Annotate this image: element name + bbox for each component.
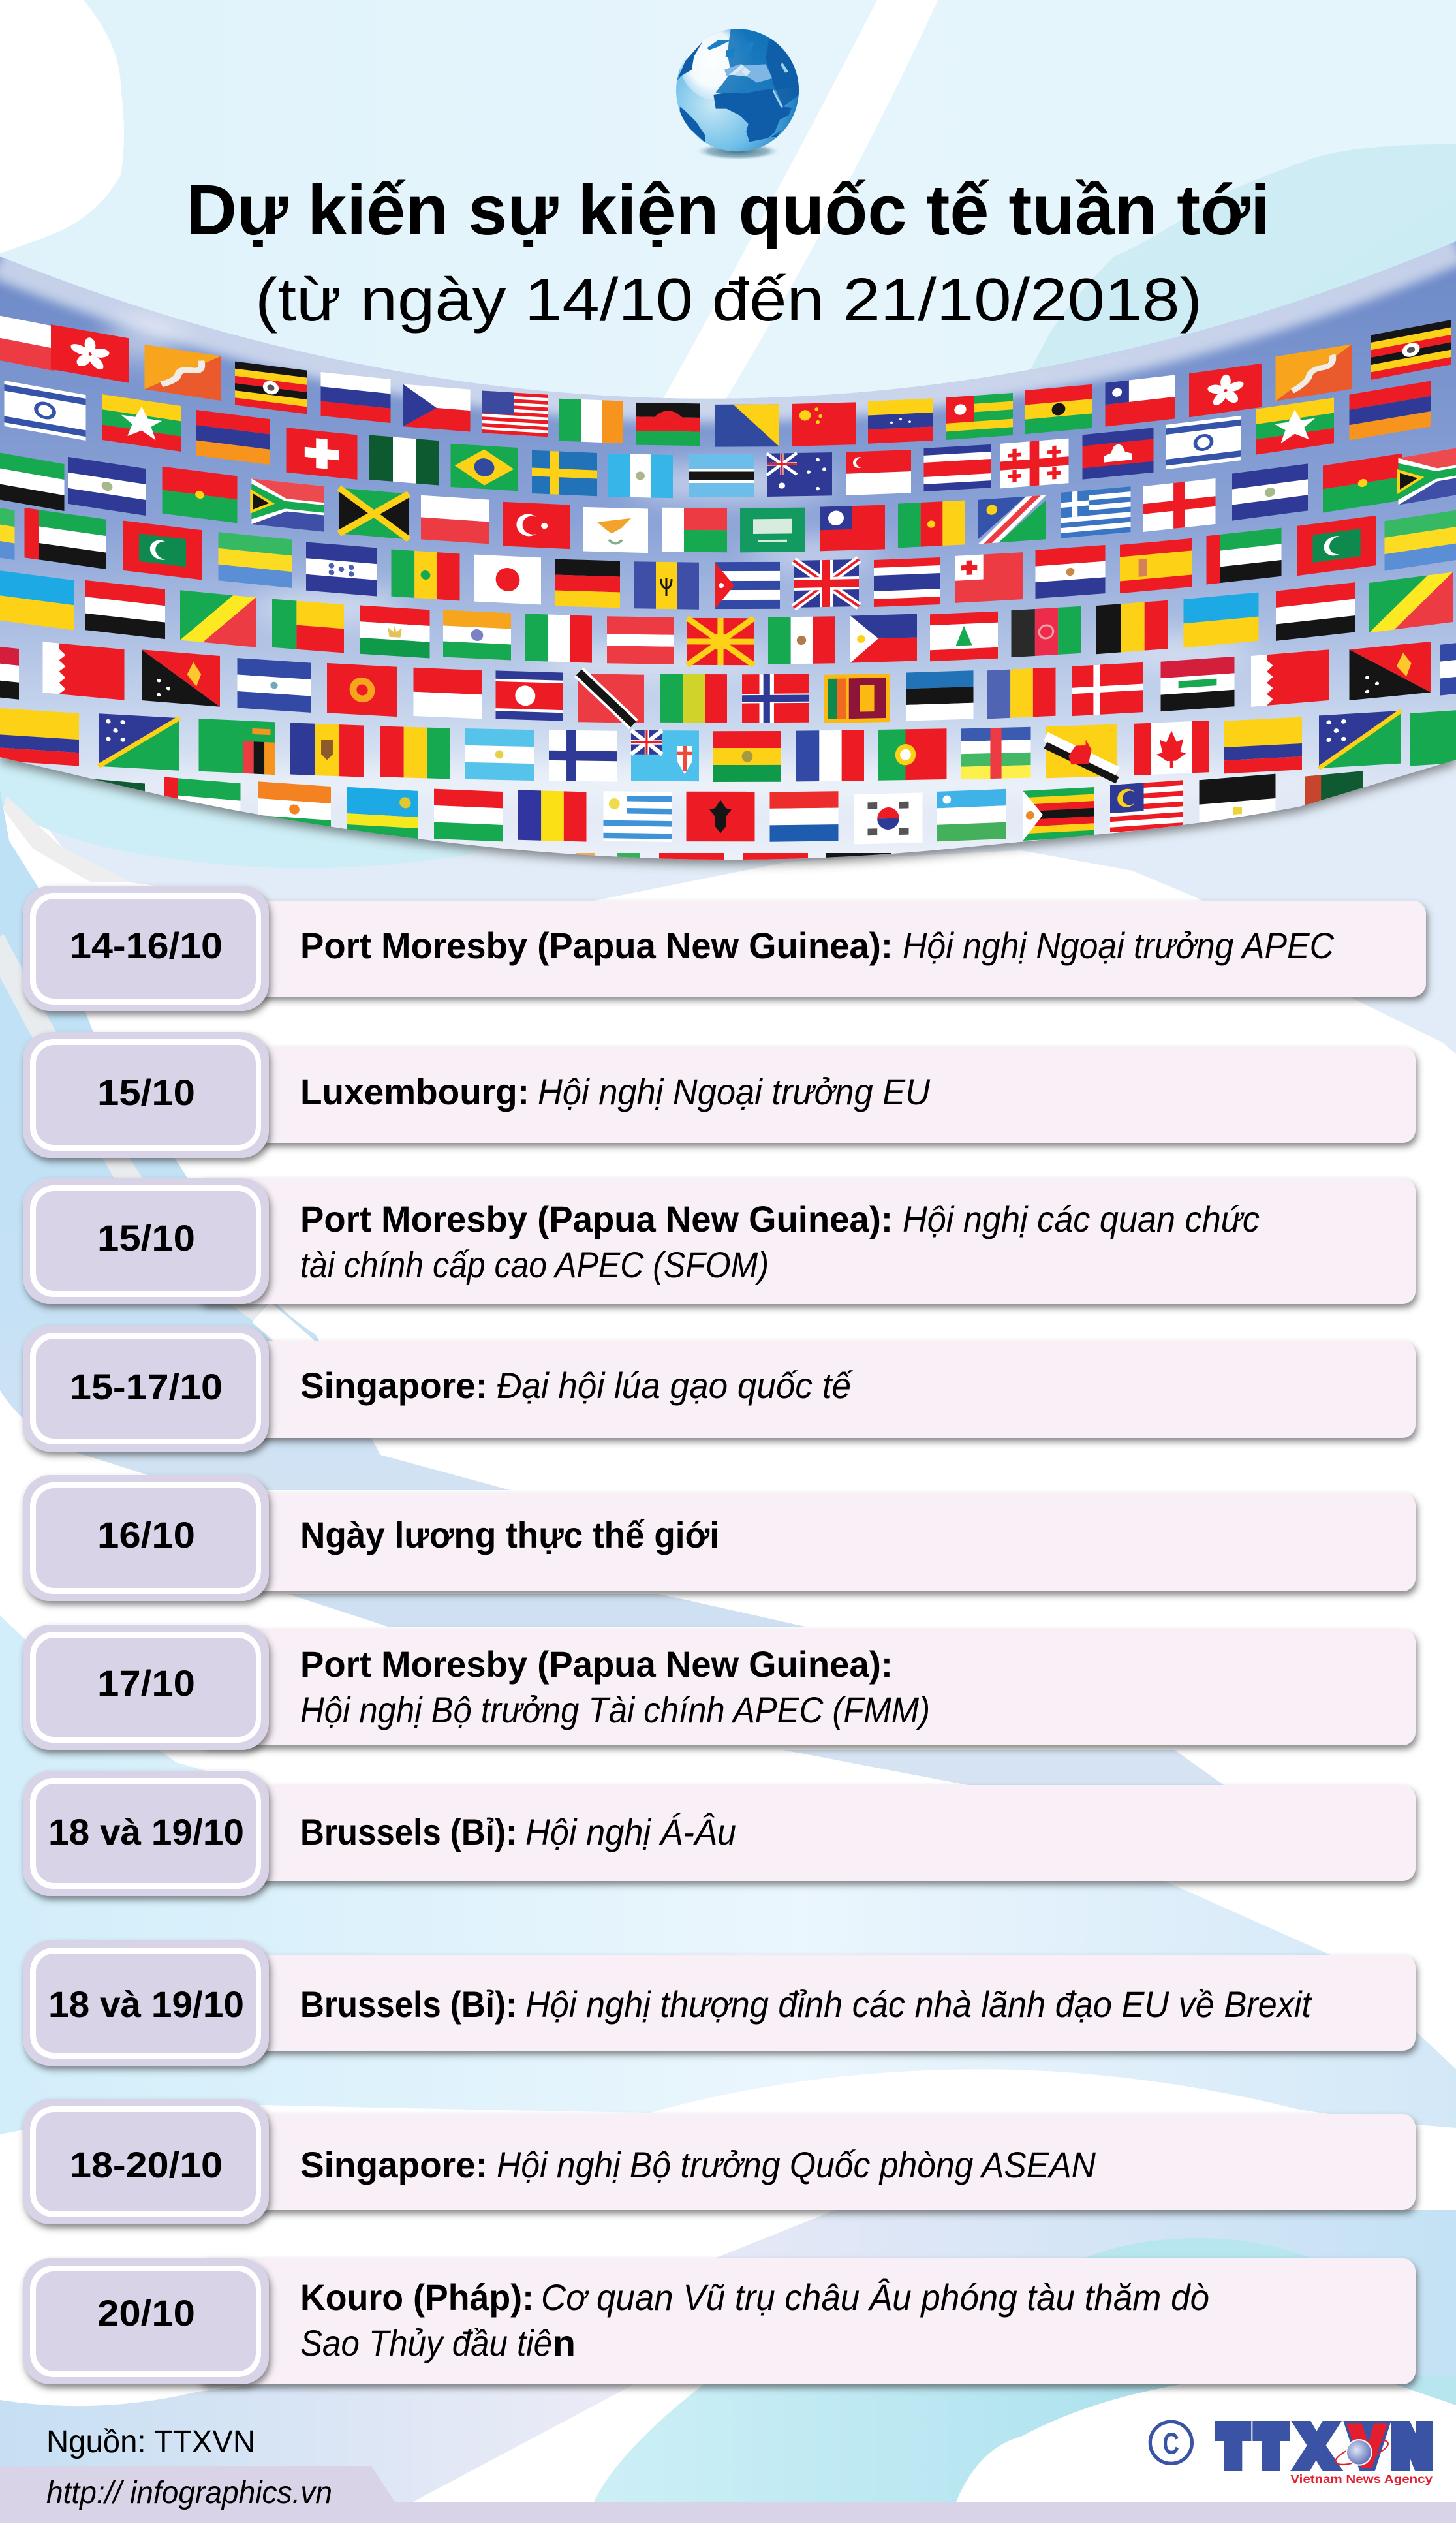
event row 5: Ngày lương thực thế giới [300,1514,719,1555]
event row 6: Port Moresby (Papua New Guinea): [300,1644,893,1685]
event row 1 [23,886,1426,1011]
flag row 4 [0,497,1456,610]
event row 7 [23,1771,1416,1896]
event row 4 [23,1326,1416,1452]
event row 8: 18 và 19/10 [48,1984,244,2025]
event row 9: Hội nghị Bộ trưởng Quốc phòng ASEAN [497,2144,1096,2185]
event row 3: Hội nghị các quan chức [903,1198,1260,1239]
flag row 6 [0,636,1456,724]
logo: copyright and TTXVN: C [1163,2426,1179,2460]
event row 3: tài chính cấp cao APEC (SFOM) [300,1244,769,1285]
event row 8: Hội nghị thượng đỉnh các nhà lãnh đạo EU về Brexit [525,1984,1312,2025]
event row 2: Hội nghị Ngoại trưởng EU [538,1071,931,1112]
logo: copyright and TTXVN: Vietnam News Agency [1290,2472,1433,2485]
flag row 5 [0,569,1453,665]
flag row 7 [0,708,1456,783]
event row 3 [23,1178,1416,1304]
icon: globe [676,18,801,160]
flag row 3 [0,444,1456,553]
event row 5: 16/10 [97,1514,195,1555]
flag banner [0,235,1456,868]
event row 1: Port Moresby (Papua New Guinea): [300,925,893,966]
logo: copyright and TTXVN [1150,2421,1433,2485]
event row 3: Port Moresby (Papua New Guinea): [300,1198,893,1239]
event row 5 [23,1475,1416,1601]
event row 2 [23,1032,1416,1158]
flag row 2 [4,381,1431,498]
event row 3: 15/10 [97,1217,195,1258]
website text: http:// infographics.vn [46,2476,332,2510]
source text: Nguồn: TTXVN [46,2425,255,2459]
event row 1: 14-16/10 [70,925,223,966]
event row 1: Hội nghị Ngoại trưởng APEC [903,925,1335,966]
event row 10: Sao Thủy đầu tiê [300,2322,552,2363]
event row 7: 18 và 19/10 [48,1811,244,1852]
event row 9 [23,2099,1416,2224]
event row 10: Kouro (Pháp): [300,2277,534,2318]
event row 7: Hội nghị Á-Âu [525,1811,736,1852]
event row 2: Luxembourg: [300,1071,529,1112]
event row 10: n [553,2322,576,2363]
event row 4: 15-17/10 [70,1366,223,1407]
event row 9: Singapore: [300,2144,488,2185]
event row 9: 18-20/10 [70,2144,223,2185]
event row 10: Cơ quan Vũ trụ châu Âu phóng tàu thăm dò [541,2277,1209,2318]
event row 8: Brussels (Bỉ): [300,1984,517,2025]
event row 6: Hội nghị Bộ trưởng Tài chính APEC (FMM) [300,1689,930,1730]
event row 4: Singapore: [300,1365,488,1406]
flag row 8 [93,771,1363,845]
subtitle: (từ ngày 14/10 đến 21/10/2018) [255,266,1202,334]
event row 6 [23,1625,1416,1750]
event row 2: 15/10 [97,1072,195,1113]
event row 10 [23,2258,1416,2384]
flag row 9 [576,853,891,860]
flag row 1 [0,311,1451,447]
event row 10: 20/10 [97,2292,195,2333]
title: Dự kiến sự kiện quốc tế tuần tới [186,170,1270,250]
event row 4: Đại hội lúa gạo quốc tế [497,1365,854,1406]
footer band [0,2466,1456,2523]
event row 7: Brussels (Bỉ): [300,1811,517,1852]
event row 8 [23,1940,1416,2066]
event row 6: 17/10 [97,1662,195,1704]
